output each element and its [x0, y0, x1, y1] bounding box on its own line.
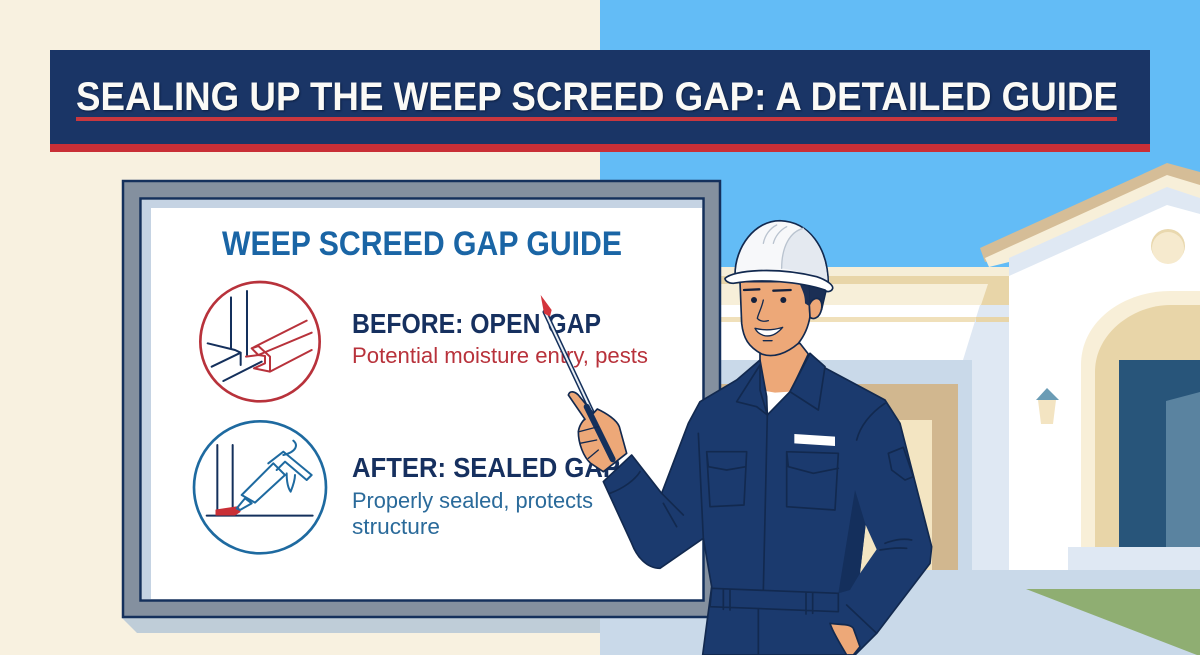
right sleeve cuff line — [610, 472, 640, 493]
shoulder seam and patch — [857, 403, 913, 480]
lawn — [1026, 589, 1200, 655]
after description second line: structure — [352, 514, 440, 539]
title text: SEALING UP THE WEEP SCREED GAP: A DETAILED GUIDE — [76, 75, 1118, 119]
eyes — [751, 297, 757, 303]
before heading: BEFORE: OPEN GAP — [352, 308, 601, 339]
pocket hand — [830, 623, 860, 655]
face — [740, 282, 810, 356]
after heading: AFTER: SEALED GAP — [352, 452, 620, 483]
after icon — [194, 421, 326, 553]
nose — [757, 300, 768, 321]
entry step — [1068, 547, 1200, 570]
placket — [758, 415, 767, 655]
hair — [798, 278, 827, 310]
shaded torso side — [838, 490, 866, 593]
arm inner crease — [698, 433, 703, 538]
before icon — [200, 282, 320, 401]
gable roof — [980, 163, 1200, 280]
mouth — [755, 327, 783, 336]
garage door frame — [600, 360, 972, 570]
neck — [760, 343, 808, 415]
round gable window — [1151, 229, 1185, 264]
undershirt — [760, 390, 790, 415]
coverall details — [610, 353, 913, 655]
ear — [809, 298, 822, 318]
before description: Potential moisture entry, pests — [352, 343, 648, 368]
coverall body and arms — [603, 353, 932, 655]
collar — [737, 353, 825, 415]
title underline — [76, 117, 1117, 121]
hair fringe — [799, 282, 810, 307]
hard hat — [725, 221, 833, 292]
sleeve folds — [662, 493, 912, 633]
belt — [710, 588, 838, 614]
gap between torso and arm — [860, 525, 877, 573]
title banner — [50, 50, 1150, 152]
head — [740, 278, 827, 356]
chest pocket right — [787, 452, 838, 510]
gable wall — [1009, 205, 1200, 570]
worker figure — [541, 221, 932, 655]
wall lamp — [1036, 388, 1059, 424]
left wing of house — [600, 267, 1009, 570]
arched entry — [1081, 291, 1200, 547]
ground — [600, 570, 1200, 655]
brows — [744, 289, 791, 291]
chest pocket left — [707, 452, 747, 507]
background: cream wall — [0, 0, 600, 655]
name badge — [794, 434, 835, 446]
board shadow — [122, 618, 600, 633]
pointer — [541, 295, 592, 412]
house illustration — [600, 163, 1200, 655]
pointing hand — [568, 392, 627, 472]
background: sky — [600, 0, 1200, 570]
after description: Properly sealed, protects — [352, 488, 593, 513]
presentation board — [123, 181, 720, 617]
board heading: WEEP SCREED GAP GUIDE — [222, 225, 622, 263]
